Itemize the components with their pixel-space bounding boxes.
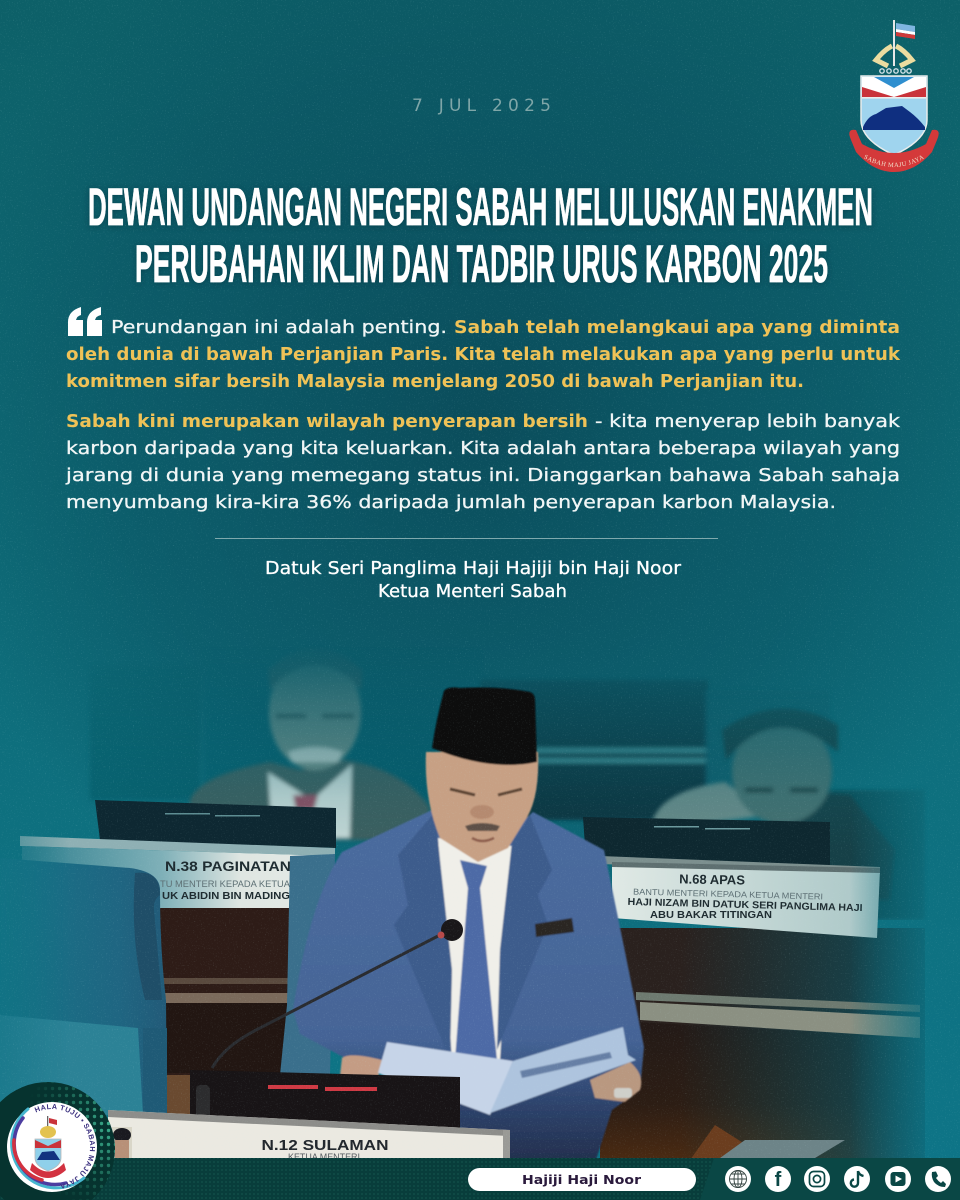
name pill: Hajiji Haji Noor bbox=[522, 1172, 642, 1187]
document bbox=[378, 1027, 636, 1115]
quote paragraph two: jarang di dunia yang memegang status ini. Dianggarkan bahawa Sabah sahaja bbox=[65, 465, 900, 486]
wreath bbox=[880, 69, 911, 73]
front name plate: N.12 SULAMAN bbox=[262, 1137, 388, 1154]
right name plate: HAJI NIZAM BIN DATUK SERI PANGLIMA HAJI bbox=[627, 897, 863, 914]
white disc bbox=[7, 1102, 97, 1192]
mini crest bbox=[30, 1116, 66, 1178]
microphone bbox=[212, 919, 463, 1068]
name pill bbox=[468, 1168, 696, 1191]
attribution bbox=[265, 559, 682, 602]
quote paragraph two: Sabah kini merupakan wilayah penyerapan bersih bbox=[66, 411, 588, 432]
jacket bbox=[293, 810, 644, 1160]
icon: facebook: f bbox=[775, 1169, 782, 1191]
right name plate bbox=[612, 862, 880, 938]
right lapel bbox=[497, 815, 552, 1050]
right back-bench member bbox=[652, 709, 895, 900]
logo: Hala Tuju badge bbox=[0, 1082, 115, 1200]
title bbox=[88, 178, 873, 294]
icon: facebook bbox=[765, 1166, 791, 1192]
blue chair left bbox=[0, 858, 167, 1115]
ribbon: SABAH MAJU JAYA bbox=[864, 154, 924, 168]
right monitor bbox=[583, 817, 880, 874]
badge lettering: HALA TUJU • SABAH MAJU JAYA bbox=[34, 1104, 96, 1188]
right desk woodwork bbox=[600, 928, 925, 1160]
quote paragraph two: menyumbang kira-kira 36% daripada jumlah penyerapan karbon Malaysia. bbox=[66, 492, 836, 513]
quote paragraph one bbox=[66, 317, 901, 392]
left name plate bbox=[22, 846, 312, 908]
quote paragraph two bbox=[65, 411, 901, 513]
quote paragraph two: karbon daripada yang kita keluarkan. Kita adalah antara beberapa wilayah yang bbox=[66, 438, 900, 459]
podium unit bbox=[190, 1070, 460, 1130]
icon: instagram bbox=[804, 1166, 830, 1192]
speaker figure bbox=[293, 687, 644, 1160]
icon: phone bbox=[925, 1166, 951, 1192]
back wall and members bbox=[90, 648, 925, 920]
hands bbox=[340, 1055, 641, 1102]
left name plate: N.38 PAGINATAN bbox=[165, 859, 291, 874]
flag bbox=[893, 20, 915, 66]
quote paragraph one: komitmen sifar bersih Malaysia menjelang 2050 di bawah Perjanjian itu. bbox=[66, 371, 804, 392]
icon: youtube bbox=[885, 1166, 911, 1192]
photo: Chief Minister speaking at the podium bbox=[108, 687, 644, 1162]
right name plate: BANTU MENTERI KEPADA KETUA MENTERI bbox=[633, 887, 823, 901]
footer bar bbox=[0, 1158, 960, 1200]
icon: website globe bbox=[725, 1166, 751, 1192]
attribution: Ketua Menteri Sabah bbox=[378, 582, 567, 602]
quote paragraph one: Perundangan ini adalah penting. bbox=[111, 317, 447, 338]
black songkok bbox=[432, 687, 537, 765]
left lapel bbox=[394, 812, 452, 1060]
attribution: Datuk Seri Panglima Haji Hajiji bin Haji Noor bbox=[265, 559, 682, 579]
name badge bbox=[535, 918, 574, 937]
colour swooshes bbox=[12, 1109, 84, 1188]
right name plate: N.68 APAS bbox=[679, 871, 745, 888]
date: 7 JUL 2025 bbox=[412, 96, 551, 116]
badge backing bbox=[0, 1082, 115, 1200]
crest arms bbox=[876, 46, 912, 66]
icon: tiktok bbox=[844, 1166, 870, 1192]
quote paragraph two: - kita menyerap lebih banyak bbox=[595, 411, 901, 432]
mount kinabalu bbox=[863, 106, 925, 130]
quote paragraph one: oleh dunia di bawah Perjanjian Paris. Kita telah melakukan apa yang perlu untuk bbox=[66, 344, 901, 365]
desk woodwork left bbox=[155, 908, 295, 1115]
right name plate: ABU BAKAR TITINGAN bbox=[650, 910, 772, 921]
tie bbox=[455, 860, 497, 1060]
quote paragraph one: Sabah telah melangkaui apa yang diminta bbox=[454, 317, 900, 338]
icon: quote mark bbox=[68, 307, 102, 336]
left back-bench member bbox=[190, 648, 430, 840]
front name plate bbox=[108, 1110, 510, 1162]
front name plate: KETUA MENTERI bbox=[288, 1152, 360, 1162]
blue chair behind speaker bbox=[280, 854, 335, 1075]
shirt bbox=[438, 838, 512, 1062]
shield chevron bbox=[862, 77, 926, 99]
shield bbox=[861, 76, 927, 155]
logo: Sabah state crest bbox=[849, 20, 939, 172]
facial features bbox=[450, 789, 522, 841]
ribbon bbox=[849, 130, 939, 172]
left name plate: TU MENTERI KEPADA KETUA bbox=[160, 879, 290, 889]
photo: back row of the assembly chamber bbox=[0, 648, 925, 1160]
left name plate: UK ABIDIN BIN MADING bbox=[162, 891, 290, 902]
face bbox=[426, 752, 538, 862]
left monitor and desk bbox=[20, 800, 336, 856]
wall panels bbox=[91, 681, 922, 920]
